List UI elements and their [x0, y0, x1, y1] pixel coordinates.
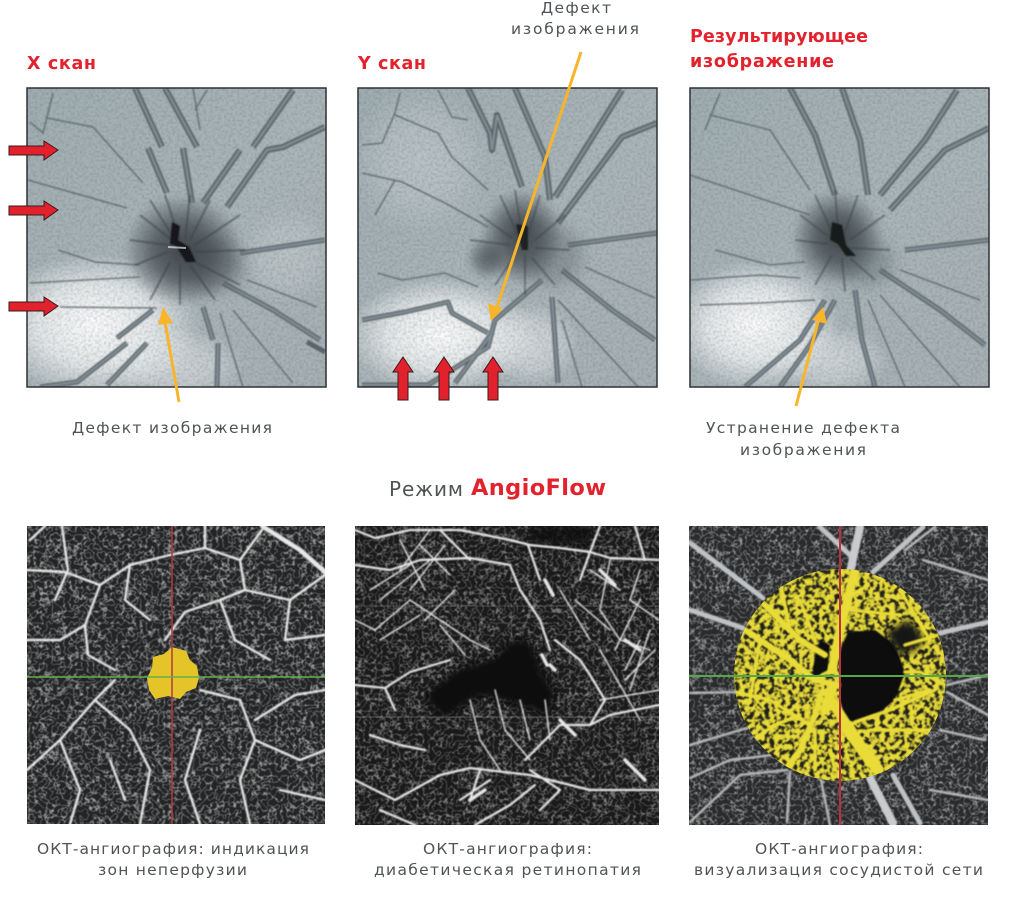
arrow: red up arrow 3 [483, 357, 503, 400]
panel: Y scan fundus image [345, 85, 657, 393]
blob: yellow non-perfusion zone [147, 647, 199, 699]
arrow: red up arrow 2 [434, 357, 454, 400]
arrow: orange result defect removed [796, 307, 827, 406]
crosshair: red vertical line [171, 526, 173, 824]
panel: OCT angiography non-perfusion [27, 526, 325, 824]
label: defect removal [706, 419, 900, 459]
label: image defect X scan: Дефект изображения [72, 419, 272, 437]
panel frame: Y scan [358, 88, 657, 387]
caption: diabetic retinopathy [374, 840, 641, 879]
panel: OCT angiography vascular network [689, 526, 988, 825]
arrow: red right arrow 2 [9, 201, 58, 220]
caption: non-perfusion [37, 840, 309, 879]
heading: AngioFlow mode: Режим [389, 477, 463, 501]
panel frame: X scan [27, 88, 326, 387]
heading: resulting image: Результирующее [690, 27, 868, 47]
label: defect above Y scan: изображения [511, 20, 639, 38]
heading: AngioFlow mode: AngioFlow [471, 475, 606, 501]
arrow: red right arrow 1 [9, 141, 58, 160]
heading: resulting image: изображение [690, 52, 834, 72]
caption: vascular network: визуализация сосудистой сети [694, 861, 983, 879]
caption: non-perfusion: ОКТ-ангиография: индикация [37, 840, 309, 858]
caption: non-perfusion: зон неперфузии [98, 861, 247, 879]
label: defect above Y scan [511, 0, 639, 38]
caption: vascular network [694, 840, 983, 879]
crosshair: red vertical line [839, 526, 841, 825]
crosshair: green horizontal line [689, 675, 988, 677]
arrow: red up arrow 1 [393, 357, 413, 400]
arrow: red right arrow 3 [9, 297, 58, 316]
arrow: orange Y scan defect [488, 52, 581, 321]
caption: diabetic retinopathy: ОКТ-ангиография: [423, 840, 592, 858]
arrow: orange X scan defect [158, 307, 179, 402]
crosshair: green horizontal line [27, 676, 325, 678]
heading: AngioFlow mode [389, 475, 606, 501]
chart: yellow analysed circle [734, 569, 946, 781]
panel: resulting fundus image [670, 88, 989, 395]
label: defect removal: Устранение дефекта [706, 419, 900, 437]
caption: vascular network: ОКТ-ангиография: [755, 840, 923, 858]
label: defect removal: изображения [740, 441, 866, 459]
heading: resulting image [690, 27, 868, 72]
heading: X scan: Х скан [27, 54, 96, 74]
panel: OCT angiography diabetic retinopathy [355, 526, 660, 825]
panel frame: resulting image [690, 88, 989, 387]
panel: X scan fundus image [28, 88, 326, 386]
caption: diabetic retinopathy: диабетическая ретинопатия [374, 861, 641, 879]
heading: Y scan: Y скан [357, 54, 426, 74]
